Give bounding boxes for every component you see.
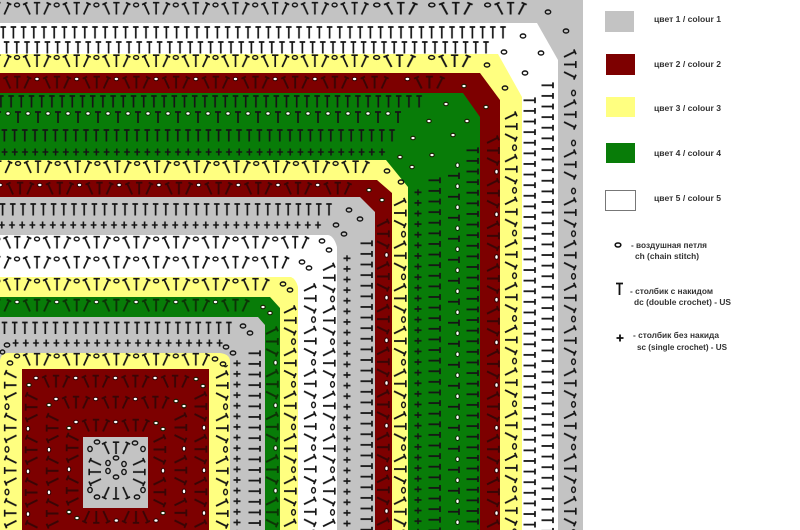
stitches: red row <box>0 76 488 109</box>
band: centre yellow round <box>0 353 230 530</box>
band: centre red block <box>22 369 209 530</box>
band: green round <box>0 93 480 530</box>
stitches: third green column <box>265 324 279 530</box>
stitches: right column yellow <box>504 109 518 530</box>
band: third yellow round <box>0 277 298 530</box>
stitches: right column white <box>523 80 554 530</box>
stitches: inner grey rows <box>0 203 363 236</box>
legend text: single crochet <box>633 330 727 352</box>
legend text: single crochet: sc (single crochet) - US <box>637 342 727 352</box>
legend label: colour 5: цвет 5 / colour 5 <box>654 193 721 203</box>
band: dark red round <box>0 73 500 530</box>
stitches: third yellow row <box>0 278 293 292</box>
legend swatch: colour 2 <box>606 54 635 75</box>
band: inner red round <box>0 180 392 530</box>
stitches: centre red rings <box>24 374 208 530</box>
legend icon: chain stitch <box>615 243 621 247</box>
stitches: yellow row <box>0 54 508 90</box>
legend label: colour 1: цвет 1 / colour 1 <box>654 14 721 24</box>
stitches: inner red row <box>0 182 384 202</box>
legend text: double crochet: dc (double crochet) - US <box>634 297 731 307</box>
legend swatch: colour 4 <box>606 143 635 163</box>
stitches: third yellow column <box>283 303 297 530</box>
legend swatch: colour 3 <box>606 97 635 117</box>
stitches: inner white rows <box>0 236 332 270</box>
stitches: right column outer grey <box>563 47 577 530</box>
stitches: right columns green <box>412 145 479 530</box>
stitches: top grey row <box>0 2 569 33</box>
legend text: chain stitch: ch (chain stitch) <box>635 251 699 261</box>
stitches: inner grey columns <box>342 238 373 530</box>
stitches: centre magic ring <box>88 440 146 500</box>
legend icon: single crochet <box>616 334 624 342</box>
legend label: colour 4: цвет 4 / colour 4 <box>654 148 721 158</box>
stitches: right column red <box>486 133 500 530</box>
band: inner yellow round <box>0 160 408 530</box>
band: yellow round <box>0 54 522 530</box>
band: inner white round <box>0 235 337 530</box>
legend text: double crochet <box>630 286 731 307</box>
legend icon: double crochet <box>616 284 623 295</box>
legend text: single crochet: - столбик без накида <box>633 330 719 340</box>
stitches: inner white columns <box>303 261 336 530</box>
stitches: green rows <box>0 95 469 169</box>
legend text: chain stitch <box>631 240 707 261</box>
band: centre grey square <box>83 437 148 508</box>
stitches: white double crochet rows <box>0 26 544 75</box>
stitches: inner yellow column <box>393 196 407 530</box>
legend text: double crochet: - столбик с накидом <box>630 286 713 296</box>
stitches: third green row <box>0 298 272 315</box>
stitches: inner red column <box>376 217 390 530</box>
band: inner grey round <box>0 197 375 530</box>
stitches: third grey rows <box>0 322 253 355</box>
legend label: colour 2: цвет 2 / colour 2 <box>654 59 721 69</box>
stitches: third grey columns <box>232 348 261 530</box>
stitches: inner yellow row <box>0 160 404 184</box>
legend label: colour 3: цвет 3 / colour 3 <box>654 103 721 113</box>
stitches: centre yellow round <box>4 352 229 530</box>
legend swatch: colour 1 <box>605 11 634 32</box>
legend text: chain stitch: - воздушная петля <box>631 240 707 250</box>
band: white round <box>0 23 558 530</box>
band: third green round <box>0 297 280 530</box>
band: third grey round <box>0 317 265 530</box>
legend swatch: colour 5 <box>606 190 636 210</box>
band: outer grey <box>0 0 583 530</box>
